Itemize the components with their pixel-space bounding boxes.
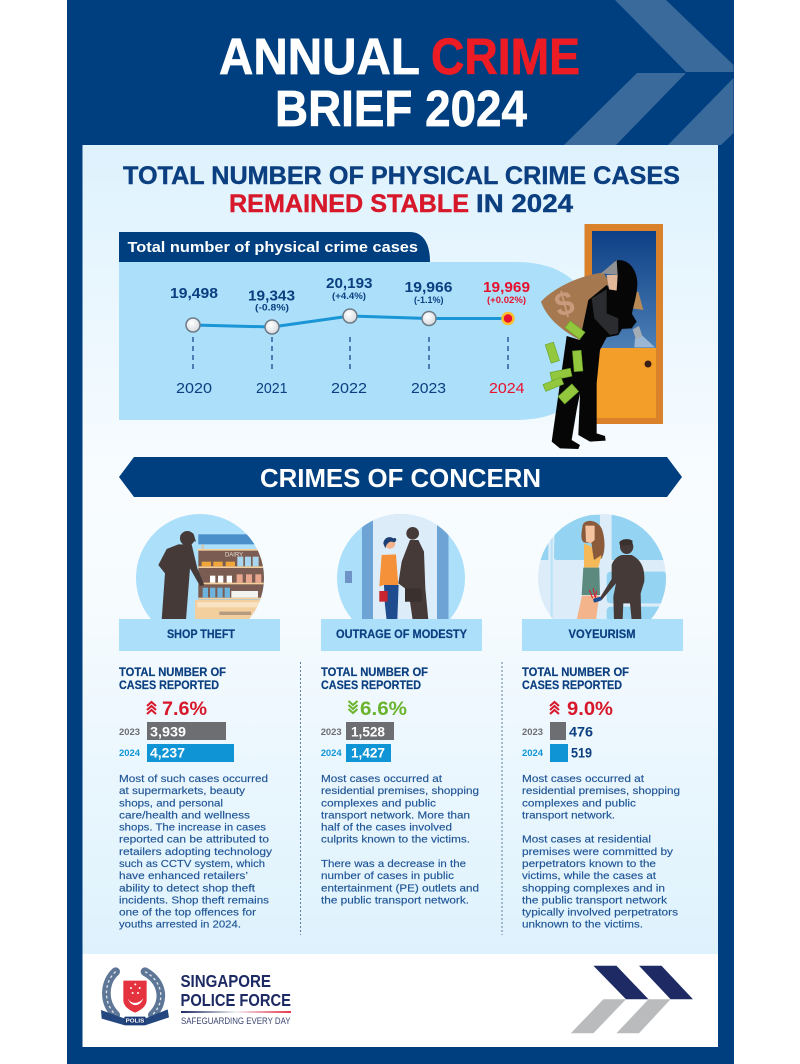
- trend line: [193, 316, 508, 327]
- bars: outrage of modesty: [321, 722, 394, 762]
- panel: voyeurism: [522, 510, 683, 931]
- title: CRIME: [431, 28, 580, 85]
- label: voyeurism: VOYEURISM: [568, 629, 636, 641]
- label: shop theft: SHOP THEFT: [167, 629, 235, 641]
- text: outrage of modesty: transport network. More than: [321, 810, 470, 821]
- subtitle: REMAINED STABLE: [229, 190, 469, 218]
- text: voyeurism: perpetrators known to the: [522, 859, 656, 870]
- subtitle: [123, 162, 680, 218]
- text: voyeurism: typically involved perpetrators: [522, 908, 678, 919]
- title: BRIEF 2024: [275, 80, 528, 137]
- year guide lines: [193, 337, 508, 372]
- text: shop theft: Most of such cases occurred: [119, 774, 268, 785]
- chart tab heading: [119, 232, 430, 262]
- text: shop theft: care/health and wellness: [119, 810, 250, 821]
- text: voyeurism: complexes and public: [522, 798, 636, 809]
- door illustration: [584, 224, 663, 424]
- bars: outrage of modesty: 2023: [321, 727, 342, 738]
- text: voyeurism: the public transport network: [522, 895, 668, 906]
- label: voyeurism: [522, 619, 683, 651]
- text: voyeurism: [522, 774, 680, 931]
- year labels: 2020: [176, 380, 212, 397]
- stat: down 6.6%: 6.6%: [360, 699, 407, 720]
- police wordmark: SAFEGUARDING EVERY DAY: [181, 1016, 291, 1026]
- text: shop theft: ability to detect shop theft: [119, 883, 255, 894]
- bars: shop theft: [119, 722, 234, 762]
- highlighted 2024 point: [502, 313, 514, 324]
- heading: total cases: CASES REPORTED: [522, 678, 622, 692]
- title: ANNUAL: [219, 28, 420, 85]
- police wordmark: SINGAPORE: [180, 971, 271, 991]
- text: voyeurism: Most cases at residential: [522, 835, 651, 846]
- heading: total cases: TOTAL NUMBER OF: [522, 665, 629, 679]
- icon: shop theft scene: [136, 514, 264, 619]
- text: voyeurism: transport network.: [522, 810, 615, 821]
- heading: total cases: CASES REPORTED: [119, 678, 219, 692]
- text: outrage of modesty: [321, 774, 479, 906]
- footer chevrons: [571, 966, 693, 1033]
- icon: voyeurism scene: [538, 514, 666, 619]
- text: shop theft: such as CCTV system, which: [119, 859, 265, 870]
- subtitle: TOTAL NUMBER OF PHYSICAL CRIME CASES: [123, 162, 680, 190]
- data values: (-1.1%): [414, 295, 444, 306]
- subtitle: IN 2024: [476, 190, 573, 218]
- text: shop theft: at supermarkets, beauty: [119, 786, 246, 797]
- data values: 19,966: [404, 279, 452, 296]
- illustration: burglar with money bag: [541, 260, 655, 449]
- stat: up 9.0%: 9.0%: [567, 699, 613, 720]
- bars: shop theft: 2024: [119, 748, 141, 759]
- text: outrage of modesty: There was a decrease in the: [321, 859, 466, 870]
- text: shop theft: retailers adopting technology: [119, 847, 273, 858]
- icon: shop theft scene: DAIRY: [225, 553, 243, 559]
- stat: up 7.6%: 7.6%: [162, 699, 207, 720]
- text: shop theft: shops. The increase in cases: [119, 823, 266, 834]
- bars: outrage of modesty: 1,528: [351, 724, 385, 740]
- police crest: POLIS: [126, 1019, 145, 1025]
- text: shop theft: reported can be attributed to: [119, 835, 269, 846]
- police crest: [101, 972, 169, 1025]
- data values: (-0.8%): [255, 303, 289, 314]
- label: outrage of modesty: OUTRAGE OF MODESTY: [336, 629, 467, 641]
- text: outrage of modesty: half of the cases involved: [321, 823, 452, 834]
- title: [219, 28, 580, 137]
- stat: up 9.0%: [550, 699, 613, 720]
- bars: voyeurism: [522, 722, 593, 762]
- data values: 20,193: [326, 275, 372, 292]
- data values: (+4.4%): [332, 291, 366, 302]
- text: voyeurism: shopping complexes and in: [522, 883, 665, 894]
- chart tab heading: Total number of physical crime cases: [128, 239, 418, 256]
- text: voyeurism: unknown to the victims.: [522, 920, 643, 931]
- light content panel: [82, 145, 718, 954]
- text: voyeurism: residential premises, shopping: [522, 786, 680, 797]
- heading: total cases: TOTAL NUMBER OF: [119, 665, 226, 679]
- icon: outrage of modesty scene: [337, 514, 465, 619]
- label: outrage of modesty: [321, 619, 482, 651]
- year labels: 2024: [489, 380, 524, 397]
- data values: 19,498: [170, 285, 218, 302]
- year labels: [176, 380, 524, 397]
- text: outrage of modesty: entertainment (PE) outlets and: [321, 883, 479, 894]
- bars: shop theft: 4,237: [150, 745, 185, 761]
- police wordmark: POLICE FORCE: [180, 990, 291, 1010]
- year labels: 2023: [411, 380, 446, 397]
- panel: shop theft: [119, 510, 280, 931]
- text: shop theft: [119, 774, 273, 931]
- bars: voyeurism: 2024: [522, 748, 544, 759]
- year labels: 2022: [331, 380, 367, 397]
- heading: total cases: CASES REPORTED: [321, 678, 421, 692]
- heading: total cases: [321, 665, 428, 692]
- year labels: 2021: [256, 380, 288, 397]
- panel: outrage of modesty: [321, 510, 482, 906]
- text: outrage of modesty: Most cases occurred at: [321, 774, 442, 785]
- bars: outrage of modesty: 2024: [321, 748, 342, 759]
- text: outrage of modesty: number of cases in public: [321, 871, 454, 882]
- label: shop theft: [119, 619, 280, 651]
- bars: shop theft: 3,939: [150, 724, 186, 740]
- text: voyeurism: Most cases occurred at: [522, 774, 644, 785]
- text: outrage of modesty: residential premises, shopping: [321, 786, 479, 797]
- police wordmark: [180, 971, 291, 1026]
- text: shop theft: shops, and personal: [119, 798, 223, 809]
- heading: total cases: [119, 665, 226, 692]
- heading: total cases: TOTAL NUMBER OF: [321, 665, 428, 679]
- heading: total cases: [522, 665, 629, 692]
- illustration: burglar with money bag: $: [551, 284, 579, 325]
- text: voyeurism: premises were committed by: [522, 847, 674, 858]
- data values: 19,343: [248, 288, 295, 305]
- data points: [186, 309, 436, 334]
- panel: line chart: [119, 232, 576, 420]
- data values: 19,969: [483, 279, 530, 296]
- bars: outrage of modesty: 1,427: [351, 745, 385, 761]
- bars: voyeurism: 2023: [522, 727, 543, 738]
- text: shop theft: incidents. Shop theft remains: [119, 895, 269, 906]
- text: voyeurism: victims, while the cases at: [522, 871, 656, 882]
- text: outrage of modesty: the public transport network.: [321, 895, 469, 906]
- text: shop theft: have enhanced retailers’: [119, 871, 248, 882]
- data values: [170, 275, 530, 314]
- data values: (+0.02%): [487, 295, 526, 306]
- footer panel: [82, 954, 718, 1047]
- bars: voyeurism: 476: [569, 724, 593, 740]
- text: outrage of modesty: complexes and public: [321, 798, 436, 809]
- text: shop theft: youths arrested in 2024.: [119, 920, 241, 931]
- text: outrage of modesty: culprits known to the victims.: [321, 835, 470, 846]
- section banner: crimes of concern: CRIMES OF CONCERN: [260, 463, 541, 493]
- bars: voyeurism: 519: [571, 745, 592, 761]
- text: shop theft: one of the top offences for: [119, 908, 257, 919]
- section banner: crimes of concern: [119, 457, 682, 497]
- header chevrons: [564, 0, 734, 145]
- bars: shop theft: 2023: [119, 727, 140, 738]
